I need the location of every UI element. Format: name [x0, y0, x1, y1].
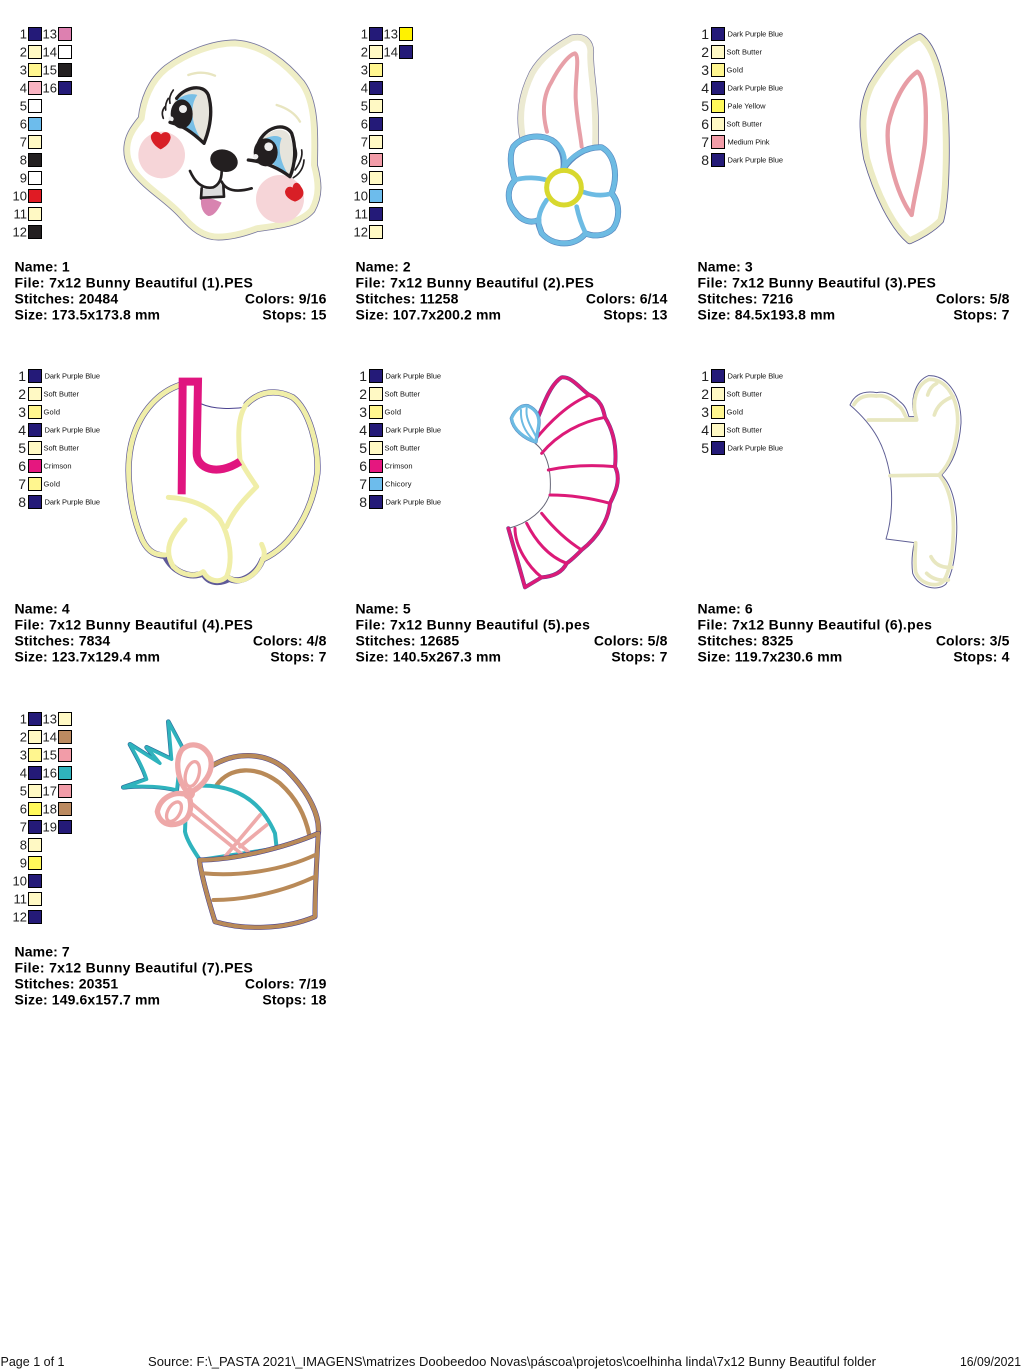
legend: design 6 colour list: 1 [701, 368, 709, 384]
legend: design 3 colour list: Medium Pink [728, 138, 770, 146]
legend: design 3 colour list: 7 [701, 134, 709, 150]
caption: design 2 details: Size: 107.7x200.2 mm [356, 306, 501, 322]
caption: design 6 details: Colors: 3/5 [936, 632, 1010, 648]
legend: design 7 colour list: 14 [43, 730, 57, 744]
legend: design 6 colour list: 2 [701, 386, 709, 402]
legend: design 4 colour list: 3 [18, 404, 26, 420]
legend: design 3 colour list: Soft Butter [726, 48, 762, 56]
legend: design 4 colour list: Dark Purple Blue [44, 372, 100, 380]
panel: design 2 ear and flower [354, 26, 668, 322]
caption: design 5 details: Name: 5 [356, 600, 411, 616]
caption: design 3 details: Stops: 7 [953, 306, 1010, 322]
embroidery: bunny body [129, 382, 318, 582]
caption: design 2 details: Colors: 6/14 [586, 290, 668, 306]
legend: design 6 colour list: Dark Purple Blue [728, 372, 783, 380]
legend: design 5 colour list: 6 [359, 458, 367, 474]
caption: design 7 details: Colors: 7/19 [245, 976, 327, 992]
caption: design 4 details: Colors: 4/8 [253, 632, 327, 648]
legend: design 1 colour list: 9 [20, 170, 27, 186]
caption: design 6 details: Stops: 4 [953, 648, 1010, 664]
legend: design 1 colour list: 7 [20, 134, 27, 150]
caption: design 6 details: File: 7x12 Bunny Beautiful (6).pes [698, 616, 932, 632]
caption: design 3 details: Name: 3 [698, 258, 753, 274]
panel: design 5 skirt [356, 368, 668, 664]
caption: design 6 details: Stitches: 8325 [698, 632, 793, 648]
legend: design 4 colour list: Crimson [44, 462, 72, 470]
legend: design 7 colour list: 8 [20, 838, 27, 852]
legend: design 1 colour list: 3 [20, 62, 27, 78]
legend: design 2 colour list: 8 [361, 152, 368, 168]
caption: design 7 details: Stops: 18 [262, 992, 327, 1008]
caption: design 5 details: Stitches: 12685 [356, 632, 459, 648]
legend: design 3 colour list: 6 [701, 116, 709, 132]
caption: design 6 details: Size: 119.7x230.6 mm [698, 648, 842, 664]
legend: design 5 colour list: 1 [359, 368, 367, 384]
legend: design 6 colour list: 5 [701, 440, 709, 456]
caption: design 6 details: Name: 6 [698, 600, 753, 616]
legend: design 1 colour list: 13 [43, 26, 57, 42]
legend: design 6 colour list: 3 [701, 404, 709, 420]
legend: design 5 colour list: 5 [359, 440, 367, 456]
legend: design 5 colour list: 3 [359, 404, 367, 420]
caption: design 2 details [356, 258, 668, 322]
legend: design 5 colour list: 7 [359, 476, 367, 492]
legend: design 5 colour list: Dark Purple Blue [386, 372, 441, 380]
legend: design 3 colour list: Pale Yellow [728, 102, 766, 110]
caption: design 5 details: Size: 140.5x267.3 mm [356, 648, 501, 664]
legend: design 5 colour list: 8 [359, 494, 367, 510]
legend: design 7 colour list: 3 [20, 748, 27, 762]
legend: design 3 colour list: Soft Butter [726, 120, 762, 128]
caption: design 7 details: Name: 7 [14, 944, 70, 960]
legend: design 3 colour list: 4 [701, 80, 709, 96]
legend: design 3 colour list: Gold [726, 66, 743, 74]
panel: design 7 basket [13, 712, 327, 1008]
legend: design 7 colour list: 13 [43, 712, 57, 726]
legend: design 4 colour list: Gold [44, 480, 60, 488]
caption: design 2 details: Name: 2 [356, 258, 411, 274]
panel: design 3 ear [698, 26, 1010, 322]
legend: design 3 colour list [701, 26, 783, 168]
footer: page number, source path and date: Page 1 of 1 [0, 1354, 64, 1369]
caption: design 1 details: Stitches: 20484 [14, 290, 118, 306]
legend: design 2 colour list: 11 [354, 206, 368, 222]
panel: design 1 face [13, 26, 327, 322]
legend: design 7 colour list: 1 [20, 712, 27, 726]
legend: design 2 colour list: 3 [361, 62, 368, 78]
embroidery: inner ear [863, 37, 946, 240]
legend: design 5 colour list: 2 [359, 386, 367, 402]
legend: design 3 colour list: 5 [701, 98, 709, 114]
legend: design 3 colour list: Dark Purple Blue [728, 30, 783, 38]
legend: design 3 colour list: 1 [701, 26, 709, 42]
caption: design 7 details: Stitches: 20351 [14, 976, 118, 992]
caption: design 4 details: Size: 123.7x129.4 mm [14, 648, 160, 664]
legend: design 7 colour list: 4 [20, 766, 27, 780]
legend: design 1 colour list: 5 [20, 98, 27, 114]
legend: design 1 colour list: 11 [14, 206, 27, 222]
caption: design 1 details: Size: 173.5x173.8 mm [14, 306, 160, 322]
panel: design 4 body with ears [14, 368, 327, 664]
legend: design 5 colour list: Dark Purple Blue [386, 426, 441, 434]
caption: design 1 details: File: 7x12 Bunny Beautiful (1).PES [14, 274, 253, 290]
legend: design 1 colour list: 16 [43, 80, 57, 96]
legend: design 2 colour list: 6 [361, 116, 368, 132]
legend: design 7 colour list: 5 [20, 784, 27, 798]
legend: design 4 colour list [18, 368, 100, 510]
caption: design 3 details: Colors: 5/8 [936, 290, 1010, 306]
legend: design 3 colour list: 3 [701, 62, 709, 78]
caption: design 4 details: Stops: 7 [270, 648, 327, 664]
legend: design 5 colour list: Gold [384, 408, 401, 416]
legend: design 7 colour list: 10 [13, 874, 27, 888]
legend: design 4 colour list: 5 [18, 440, 26, 456]
caption: design 1 details: Colors: 9/16 [245, 290, 327, 306]
caption: design 7 details [14, 944, 327, 1008]
footer: page number, source path and date: 16/09/2021 [960, 1354, 1021, 1369]
legend: design 1 colour list [13, 26, 72, 240]
legend: design 6 colour list: 4 [701, 422, 709, 438]
legend: design 1 colour list: 6 [20, 116, 27, 132]
footer: page number, source path and date: Source: F:\_PASTA 2021\_IMAGENS\matrizes Doobeedoo Novas\páscoa\projetos\coelhinha linda\7x12 Bunny Beautiful folder [148, 1354, 877, 1369]
legend: design 7 colour list: 18 [43, 802, 57, 816]
legend: design 7 colour list: 15 [43, 748, 57, 762]
legend: design 5 colour list: Dark Purple Blue [386, 498, 441, 506]
legend: design 1 colour list: 8 [20, 152, 27, 168]
caption: design 1 details: Name: 1 [14, 258, 70, 274]
caption: design 3 details: File: 7x12 Bunny Beautiful (3).PES [698, 274, 936, 290]
legend: design 2 colour list: 5 [361, 98, 368, 114]
legend: design 7 colour list: 6 [20, 802, 27, 816]
legend: design 1 colour list: 10 [13, 188, 27, 204]
legend: design 6 colour list: Gold [726, 408, 743, 416]
embroidery: arm and leg piece [850, 376, 961, 588]
legend: design 7 colour list: 7 [20, 820, 27, 834]
caption: design 7 details: File: 7x12 Bunny Beautiful (7).PES [14, 960, 253, 976]
legend: design 7 colour list: 12 [13, 910, 27, 924]
caption: design 1 details: Stops: 15 [262, 306, 327, 322]
legend: design 7 colour list [13, 712, 72, 924]
legend: design 5 colour list: 4 [359, 422, 367, 438]
panel: design 6 arm and leg [698, 368, 1010, 664]
legend: design 1 colour list: 4 [20, 80, 27, 96]
legend: design 4 colour list: 8 [18, 494, 26, 510]
caption: design 3 details: Stitches: 7216 [698, 290, 793, 306]
legend: design 2 colour list: 13 [384, 26, 398, 42]
legend: design 1 colour list: 15 [43, 62, 57, 78]
legend: design 2 colour list: 12 [354, 224, 368, 240]
legend: design 4 colour list: 6 [18, 458, 26, 474]
legend: design 2 colour list: 7 [361, 134, 368, 150]
caption: design 2 details: Stops: 13 [603, 306, 668, 322]
legend: design 1 colour list: 2 [20, 44, 27, 60]
legend: design 4 colour list: 1 [18, 368, 26, 384]
caption: design 4 details: File: 7x12 Bunny Beautiful (4).PES [14, 616, 253, 632]
legend: design 2 colour list: 14 [384, 44, 398, 60]
caption: design 4 details: Stitches: 7834 [14, 632, 110, 648]
legend: design 4 colour list: 7 [18, 476, 26, 492]
legend: design 2 colour list: 2 [361, 44, 368, 60]
embroidery: bunny face [127, 43, 318, 237]
caption: design 5 details [356, 600, 668, 664]
legend: design 1 colour list: 14 [43, 44, 57, 60]
legend: design 7 colour list: 9 [20, 856, 27, 870]
legend: design 2 colour list [354, 26, 412, 240]
caption: design 4 details [14, 600, 327, 664]
legend: design 2 colour list: 10 [354, 188, 368, 204]
embroidery: ear with flower [509, 38, 618, 243]
legend: design 2 colour list: 9 [361, 170, 368, 186]
embroidery: easter basket with egg [123, 722, 319, 927]
legend: design 6 colour list: Dark Purple Blue [728, 444, 783, 452]
legend: design 5 colour list: Chicory [385, 480, 412, 488]
legend: design 3 colour list: 8 [701, 152, 709, 168]
legend: design 4 colour list: Soft Butter [44, 390, 80, 398]
caption: design 3 details: Size: 84.5x193.8 mm [698, 306, 835, 322]
legend: design 5 colour list: Crimson [384, 462, 412, 470]
legend: design 5 colour list: Soft Butter [384, 390, 420, 398]
caption: design 4 details: Name: 4 [14, 600, 70, 616]
legend: design 5 colour list [359, 368, 441, 510]
legend: design 7 colour list: 17 [43, 784, 57, 798]
legend: design 3 colour list: Dark Purple Blue [728, 156, 783, 164]
legend: design 4 colour list: Gold [44, 408, 60, 416]
caption: design 5 details: Colors: 5/8 [594, 632, 668, 648]
legend: design 3 colour list: 2 [701, 44, 709, 60]
legend: design 4 colour list: Dark Purple Blue [44, 426, 100, 434]
legend: design 7 colour list: 11 [14, 892, 27, 906]
legend: design 7 colour list: 2 [20, 730, 27, 744]
caption: design 7 details: Size: 149.6x157.7 mm [14, 992, 160, 1008]
legend: design 4 colour list: Soft Butter [44, 444, 80, 452]
legend: design 6 colour list: Soft Butter [726, 390, 762, 398]
caption: design 2 details: File: 7x12 Bunny Beautiful (2).PES [356, 274, 594, 290]
caption: design 5 details: Stops: 7 [611, 648, 668, 664]
legend: design 4 colour list: 2 [18, 386, 26, 402]
caption: design 5 details: File: 7x12 Bunny Beautiful (5).pes [356, 616, 590, 632]
legend: design 6 colour list: Soft Butter [726, 426, 762, 434]
legend: design 4 colour list: Dark Purple Blue [44, 498, 100, 506]
legend: design 7 colour list: 19 [43, 820, 57, 834]
legend: design 7 colour list: 16 [43, 766, 57, 780]
caption: design 3 details [698, 258, 1010, 322]
legend: design 6 colour list [701, 368, 783, 456]
legend: design 5 colour list: Soft Butter [384, 444, 420, 452]
legend: design 2 colour list: 1 [361, 26, 368, 42]
legend: design 2 colour list: 4 [361, 80, 368, 96]
caption: design 1 details [14, 258, 327, 322]
legend: design 1 colour list: 12 [13, 224, 27, 240]
legend: design 1 colour list: 1 [20, 26, 27, 42]
legend: design 3 colour list: Dark Purple Blue [728, 84, 783, 92]
caption: design 2 details: Stitches: 11258 [356, 290, 459, 306]
embroidery: ruffled skirt [508, 377, 618, 587]
caption: design 6 details [698, 600, 1010, 664]
legend: design 4 colour list: 4 [18, 422, 26, 438]
